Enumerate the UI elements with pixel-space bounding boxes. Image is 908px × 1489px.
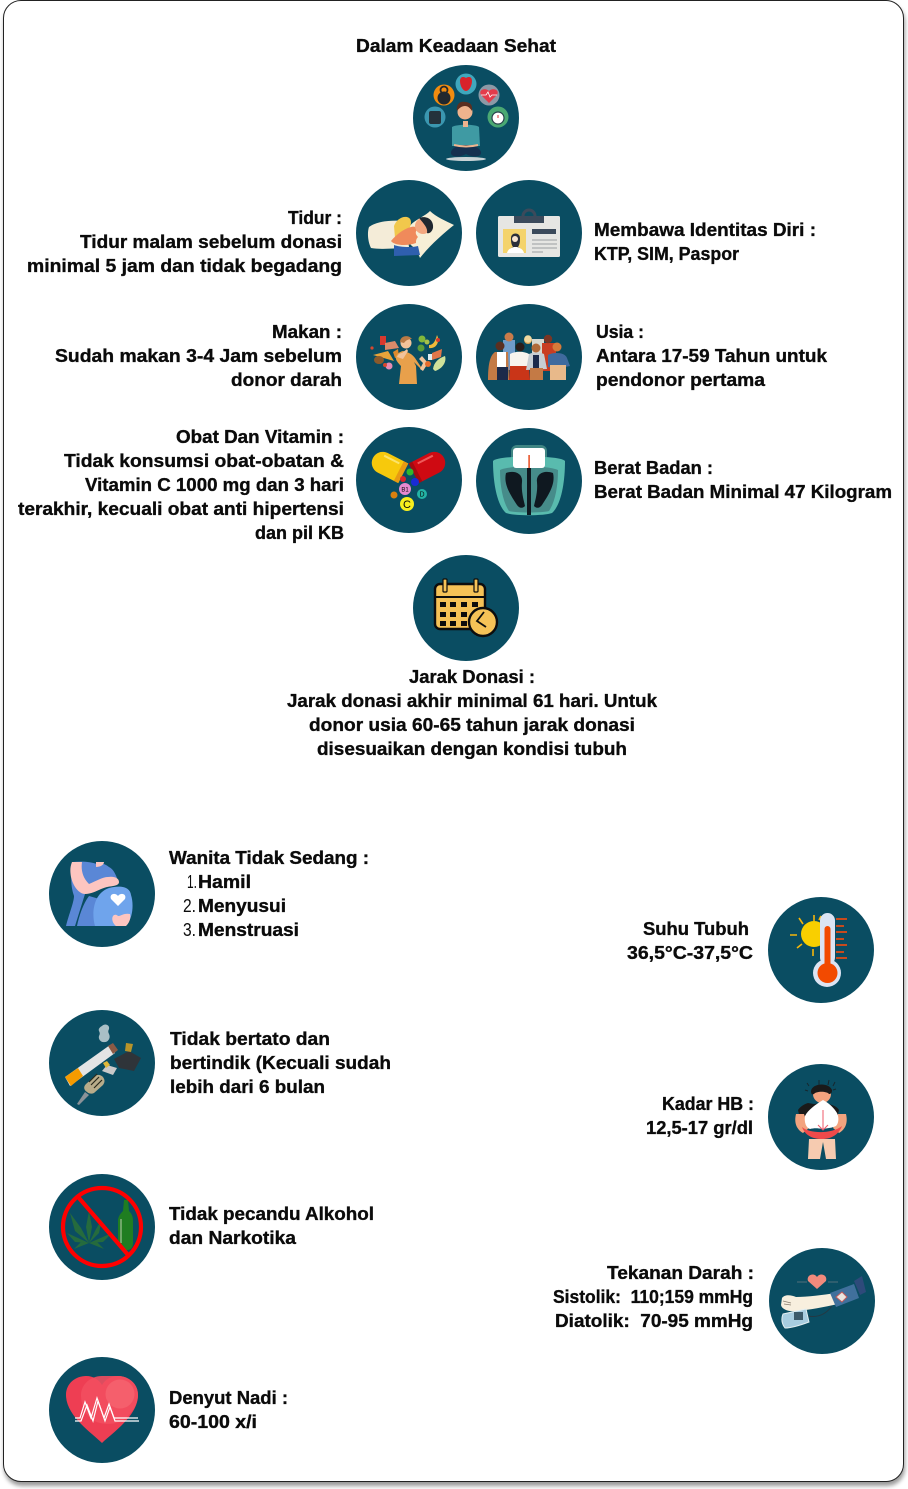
- icon: cigarette and tattoo machine: [49, 1010, 155, 1116]
- text block: Usia: Usia :: [596, 321, 644, 342]
- text block: Membawa Identitas Diri: Membawa Identitas Diri :: [594, 219, 816, 240]
- icon: group of people: [476, 304, 582, 410]
- text block: Obat Dan Vitamin: Tidak konsumsi obat-obatan &: [64, 450, 344, 471]
- text block: Tidak pecandu Alkohol dan Narkotika: [169, 1203, 374, 1248]
- text block: Denyut Nadi: 60-100 x/i: [169, 1411, 257, 1432]
- text block: Wanita Tidak Sedang: Menstruasi: [198, 919, 299, 940]
- icon: calendar and clock: [413, 555, 519, 661]
- icon: woman thinking about food: [356, 304, 462, 410]
- icon: capsule and vitamins: C: [403, 499, 411, 511]
- text block: Usia: pendonor pertama: [596, 369, 766, 390]
- text block: Wanita Tidak Sedang: Menyusui: [198, 895, 286, 916]
- text block: Wanita Tidak Sedang: 3.: [183, 919, 196, 940]
- text block: Makan: Makan :: [272, 321, 342, 342]
- text block: Wanita Tidak Sedang: [169, 847, 369, 940]
- text block: Wanita Tidak Sedang: 2.: [183, 895, 196, 916]
- icon: low hemoglobin person: [768, 1064, 874, 1170]
- text block: Tekanan Darah: Diatolik: 70-95 mmHg: [555, 1310, 753, 1331]
- text block: Jarak Donasi: Jarak donasi akhir minimal 61 hari. Untuk: [287, 690, 658, 711]
- text block: Wanita Tidak Sedang: 1.: [187, 871, 197, 892]
- icon: no alcohol and narcotics: [49, 1174, 155, 1280]
- text block: Jarak Donasi: donor usia 60-65 tahun jarak donasi: [309, 714, 635, 735]
- text block: Obat Dan Vitamin: Vitamin C 1000 mg dan 3 hari: [85, 474, 344, 495]
- text block: Wanita Tidak Sedang: Hamil: [198, 871, 251, 892]
- text block: Berat Badan: Berat Badan :: [594, 457, 713, 478]
- icon: capsule and vitamins: D: [419, 492, 425, 498]
- text block: Jarak Donasi: disesuaikan dengan kondisi tubuh: [317, 738, 627, 759]
- text block: Tidak pecandu Alkohol dan Narkotika: dan Narkotika: [169, 1227, 297, 1248]
- text block: Wanita Tidak Sedang: Wanita Tidak Sedang :: [169, 847, 369, 868]
- text block: Obat Dan Vitamin: dan pil KB: [255, 522, 344, 543]
- icon: capsule and vitamins: [356, 427, 462, 533]
- icon: sun and thermometer: [768, 897, 874, 1003]
- text block: Suhu Tubuh: [627, 918, 753, 963]
- text block: Tekanan Darah: Sistolik: 110;159 mmHg: [553, 1286, 753, 1307]
- heading: Dalam Keadaan Sehat: Dalam Keadaan Sehat: [356, 35, 556, 56]
- text block: Tidur: minimal 5 jam dan tidak begadang: [27, 255, 342, 276]
- text block: Makan: Sudah makan 3-4 Jam sebelum: [55, 345, 342, 366]
- text block: Berat Badan: [594, 457, 892, 502]
- icon: pregnant woman: [49, 841, 155, 947]
- text block: Membawa Identitas Diri: [594, 219, 816, 264]
- icon: healthy person: [413, 65, 519, 171]
- text block: Tidak bertato dan bertindik: [170, 1028, 391, 1097]
- text block: Tidur: Tidur :: [288, 207, 342, 228]
- text block: Tekanan Darah: Tekanan Darah :: [607, 1262, 754, 1283]
- text block: Usia: [596, 321, 828, 390]
- text block: Kadar HB: [646, 1093, 754, 1138]
- text block: Tidur: [27, 207, 342, 276]
- text block: Tidur: Tidur malam sebelum donasi: [80, 231, 342, 252]
- text block: Membawa Identitas Diri: KTP, SIM, Paspor: [594, 243, 739, 264]
- text block: Obat Dan Vitamin: [18, 426, 344, 543]
- text block: Makan: [55, 321, 342, 390]
- text block: Denyut Nadi: Denyut Nadi :: [169, 1387, 288, 1408]
- text block: Jarak Donasi: Jarak Donasi :: [409, 666, 535, 687]
- text block: Denyut Nadi: [169, 1387, 288, 1432]
- text block: Tekanan Darah: [553, 1262, 754, 1331]
- text block: Berat Badan: Berat Badan Minimal 47 Kilogram: [594, 481, 892, 502]
- icon: capsule and vitamins: B1: [401, 488, 409, 494]
- text block: Obat Dan Vitamin: Obat Dan Vitamin :: [176, 426, 344, 447]
- text block: Kadar HB: 12,5-17 gr/dl: [646, 1117, 753, 1138]
- text block: Obat Dan Vitamin: terakhir, kecuali obat anti hipertensi: [18, 498, 344, 519]
- text block: Usia: Antara 17-59 Tahun untuk: [596, 345, 828, 366]
- icon: weighing scale: [476, 428, 582, 534]
- icon: ID card: [476, 180, 582, 286]
- text block: Tidak pecandu Alkohol dan Narkotika: Tidak pecandu Alkohol: [169, 1203, 374, 1224]
- text block: Tidak bertato dan bertindik: Tidak bertato dan: [170, 1028, 330, 1049]
- icon: sleeping person: [356, 180, 462, 286]
- text block: Tidak bertato dan bertindik: lebih dari 6 bulan: [170, 1076, 325, 1097]
- text block: Suhu Tubuh: Suhu Tubuh: [643, 918, 749, 939]
- text block: Suhu Tubuh: 36,5°C-37,5°C: [627, 942, 753, 963]
- icon: heart with pulse: [49, 1357, 155, 1463]
- text block: Kadar HB: Kadar HB :: [662, 1093, 754, 1114]
- icon: blood pressure cuff: [769, 1248, 875, 1354]
- text block: Makan: donor darah: [231, 369, 342, 390]
- text block: Tidak bertato dan bertindik: bertindik (Kecuali sudah: [170, 1052, 391, 1073]
- text block: Jarak Donasi: [287, 666, 658, 759]
